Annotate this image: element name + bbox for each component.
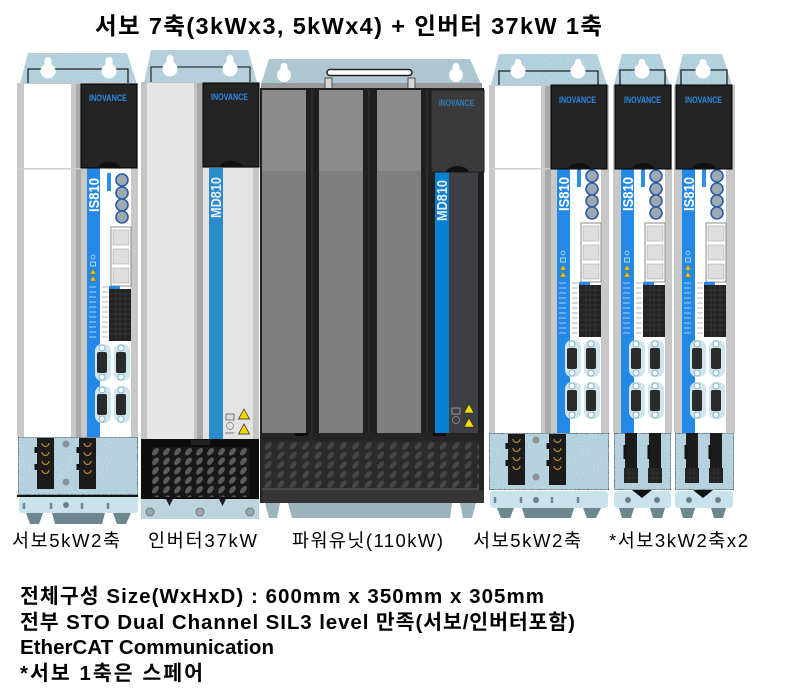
mounting bracket: [261, 59, 481, 84]
brand label: INOVANCE: [624, 95, 661, 105]
mounting plate: [141, 499, 259, 519]
mounting bracket: [614, 54, 670, 85]
model label: IS810: [621, 177, 637, 211]
spec line: safety: 전부 STO Dual Channel SIL3 level 만족(서보/인버터포함): [20, 611, 575, 634]
feet: [265, 503, 476, 518]
label: servo 5kW right: 서보5kW2축: [473, 530, 581, 551]
model label: IS810: [557, 177, 573, 211]
terminal cover: [614, 433, 671, 490]
spec line: spare: *서보 1축은 스페어: [20, 662, 203, 685]
mounting bracket: [675, 54, 732, 85]
mounting tab: [490, 491, 608, 508]
warning icons: [452, 404, 474, 427]
body: [260, 88, 484, 433]
brand label: INOVANCE: [89, 93, 127, 103]
panel: servo 5kW 2-axis module, left: [17, 53, 138, 524]
label: servo 5kW left: 서보5kW2축: [12, 530, 120, 551]
brand label: INOVANCE: [439, 98, 474, 108]
handle: [325, 70, 415, 89]
spec line: communication: EtherCAT Communication: [20, 636, 274, 659]
terminal cover: [675, 433, 734, 490]
panel: power unit 110kW: [260, 59, 484, 518]
mounting tab: [19, 497, 138, 513]
brand label: INOVANCE: [211, 92, 248, 102]
panel: servo 3kW 2-axis module A: [613, 54, 672, 518]
module labels: [12, 530, 748, 551]
terminal cover: [489, 433, 609, 490]
label: inverter: 인버터37kW: [148, 530, 258, 551]
panel: servo 3kW 2-axis module B: [674, 54, 735, 518]
body: [17, 83, 138, 437]
body: [674, 85, 735, 433]
body: [141, 82, 259, 439]
warning icons: [225, 409, 250, 434]
spec line: size: 전체구성 Size(WxHxD) : 600mm x 350mm x 305mm: [20, 585, 544, 608]
panel: servo 5kW 2-axis module, right: [489, 54, 609, 518]
model label: IS810: [87, 178, 103, 212]
body: [613, 85, 672, 433]
vent cover: [260, 433, 484, 503]
model label: IS810: [682, 177, 698, 211]
label: servo 3kW: *서보3kW2축x2: [609, 530, 748, 551]
inverter front: [449, 171, 478, 433]
body: [489, 85, 609, 433]
brand label: INOVANCE: [559, 95, 596, 105]
mounting bracket: [491, 54, 607, 85]
model label: MD810: [209, 177, 225, 218]
brand label: INOVANCE: [685, 95, 722, 105]
mounting tab: [675, 491, 733, 508]
specification text block: [20, 585, 575, 685]
model label: MD810: [435, 180, 451, 221]
mounting bracket: [144, 50, 257, 82]
mounting tab: [614, 491, 671, 508]
mounting bracket: [20, 53, 137, 84]
title: 서보 7축(3kWx3, 5kWx4) + 인버터 37kW 1축: [95, 13, 602, 39]
vent cover: [141, 439, 259, 499]
terminal cover: [18, 437, 138, 495]
label: power unit: 파워유닛(110kW): [292, 530, 443, 551]
panel: inverter 37kW module: [141, 50, 259, 519]
